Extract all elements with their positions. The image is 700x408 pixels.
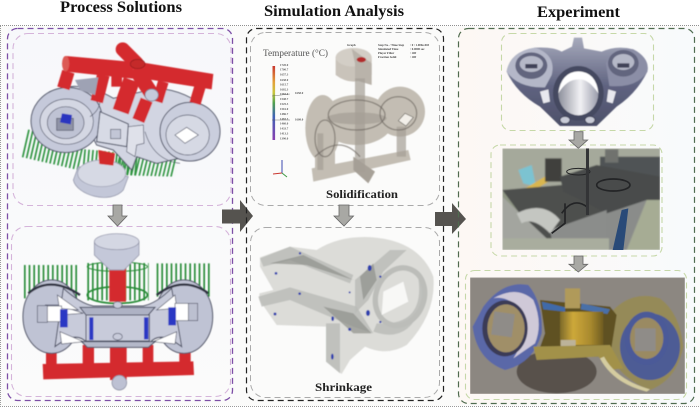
blue chills <box>60 307 176 340</box>
arrow: mould photo to casting photo <box>569 256 588 272</box>
legend: temperature colour scale: 1525.3 <box>280 102 289 106</box>
title: Experiment: Experiment <box>537 4 621 21</box>
diagram: CAD rendered part <box>507 38 648 126</box>
grey internal part <box>75 77 98 95</box>
gate cylinder <box>336 48 372 85</box>
legend: temperature colour scale: 1486.7 <box>280 112 289 116</box>
legend: temperature colour scale: 1657.3 <box>280 72 289 76</box>
legend: temperature colour scale: Temperature (°C) <box>263 48 328 59</box>
simulation info header: : Off <box>410 51 417 55</box>
green chill fins <box>24 262 211 303</box>
legend: temperature colour scale: 1413.3 <box>280 132 289 136</box>
label: Solidification: Solidification <box>326 187 398 201</box>
legend: temperature colour scale: 1602.3 <box>280 88 289 92</box>
simulation info header <box>347 43 430 59</box>
legend: temperature colour scale: 1700.7 <box>280 68 289 72</box>
bottom bosses <box>560 116 595 124</box>
blue shrinkage defects <box>273 252 381 360</box>
arrow: simulation to experiment <box>435 203 466 234</box>
central bore <box>553 66 604 121</box>
legend: temperature colour scale: 1638.0 <box>280 78 289 82</box>
title: Simulation Analysis: Simulation Analysis <box>264 3 404 20</box>
panel: solidification frame <box>250 32 440 206</box>
panel: upper process model frame <box>13 34 231 206</box>
arrow: upper to lower model <box>108 205 127 226</box>
dark overlap lines <box>270 255 377 333</box>
panel: shrinkage frame <box>250 228 440 398</box>
legend: temperature colour scale: 1583.0 <box>280 92 289 96</box>
simulation info header: Fraction Solid <box>378 55 397 59</box>
panel: experiment outer frame <box>458 28 694 404</box>
legend: temperature colour scale: 1433.7 <box>280 126 289 130</box>
legend: temperature colour scale: 1460.0 <box>280 122 289 126</box>
left and right lugs <box>507 48 648 87</box>
simulation info header: Player Filter <box>378 51 395 55</box>
legend: temperature colour scale: 1390.0 <box>280 136 289 140</box>
red sprue <box>109 268 126 302</box>
panel: lower process model frame <box>12 226 230 396</box>
legend: temperature colour scale: 1720.0 <box>280 63 289 67</box>
simulation info header: : 0 / 1.000e-003 <box>410 43 430 47</box>
pole and blue bar <box>586 148 628 250</box>
label: Shrinkage: Shrinkage <box>315 380 373 394</box>
panel: CAD part frame <box>502 34 654 130</box>
bore ring and square hole <box>367 261 433 332</box>
panel: casting photo frame <box>466 270 686 400</box>
diagram: shrinkage translucent casting <box>258 237 434 374</box>
photo: mould on workshop floor <box>502 148 660 250</box>
bridge <box>537 300 617 357</box>
legend: temperature colour scale: 1516.0 <box>280 107 289 111</box>
left ring <box>473 284 542 370</box>
outer silhouette <box>507 38 648 126</box>
legend: temperature colour scale: 1483.3 <box>280 117 289 121</box>
panel: simulation analysis outer frame <box>246 28 444 400</box>
overlapping darker volumes <box>317 78 406 172</box>
arrow: CAD to mould photo <box>569 132 588 148</box>
funnel <box>94 234 139 270</box>
diagram: bottom-gated casting model <box>23 234 213 390</box>
red runner system <box>62 49 213 121</box>
simulation info header: : 0.0000 sec <box>410 47 425 51</box>
legend: temperature colour scale <box>263 48 328 140</box>
photo: finished titanium casting <box>470 277 685 394</box>
diamond opening <box>398 113 413 126</box>
simulation info header: : Off <box>410 55 417 59</box>
dark edges <box>315 97 417 157</box>
diagram: top-gated casting model <box>25 49 220 197</box>
right ring <box>609 296 683 390</box>
icon: coordinate axes <box>273 160 287 177</box>
legend: temperature colour scale: 1658.0 <box>295 91 304 95</box>
red lower runner <box>43 345 194 380</box>
simulation info header: Step No. / Time Step <box>378 43 404 47</box>
simulation info header: Graph <box>347 43 356 47</box>
panel: process solutions outer frame <box>8 28 232 400</box>
lower cylinder <box>73 150 128 197</box>
darker ribs <box>258 247 423 373</box>
arrow: process to simulation <box>222 200 253 232</box>
panel: mould photo frame <box>491 145 662 256</box>
hub with blue insert <box>57 113 73 130</box>
side ribs openings <box>540 89 616 103</box>
arrow: solidification to shrinkage <box>334 205 354 226</box>
legend: temperature colour scale: 1608.0 <box>295 118 304 122</box>
main translucent shape <box>259 237 434 374</box>
diagram: solidification translucent casting <box>305 48 425 183</box>
casting wheels and body <box>23 280 213 353</box>
simulation info header: Simulated Time <box>378 47 399 51</box>
gate end cap <box>112 375 127 390</box>
casting body <box>26 82 220 170</box>
translucent body <box>305 87 425 183</box>
green chill fins <box>25 143 177 167</box>
legend: temperature colour scale: 1615.7 <box>280 82 289 86</box>
legend: temperature colour scale: 1548.7 <box>280 97 289 101</box>
